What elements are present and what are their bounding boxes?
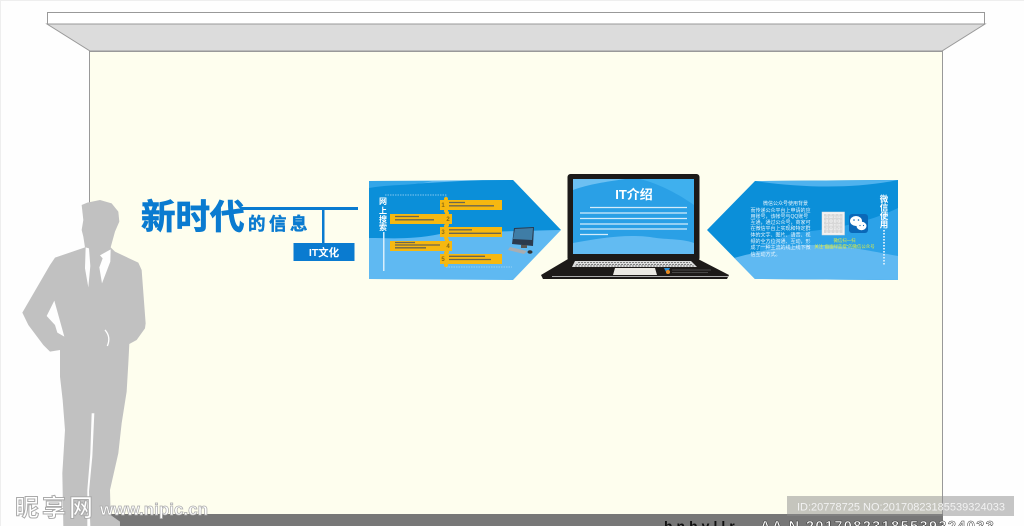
list items: 5 (441, 257, 445, 263)
vertical title: 微 (880, 194, 889, 204)
yellow caption: 微信扫一扫 (834, 237, 855, 244)
QR code (822, 212, 844, 235)
keyboard (572, 261, 697, 267)
tag: IT文化: IT文化 (309, 246, 340, 259)
body text: 用账号，该帐号与QQ账号 (750, 213, 808, 220)
body text: 在微信平台上实现和特定群 (750, 225, 811, 232)
panel: laptop IT介绍 (541, 174, 729, 279)
heading: 新时代的信息: 的信息 (248, 214, 311, 234)
body text: 微信公众号使用背景 (763, 200, 808, 207)
body text: 体的文字、图片、语音、视 (750, 232, 811, 238)
body text: 成了一种主流的线上线下微 (750, 244, 811, 251)
trackpad (613, 268, 657, 275)
floor band (89, 514, 943, 526)
icon: desktop computer (508, 227, 534, 254)
yellow caption: 关注"幽幽绿蓝摆"的微信公众号 (814, 243, 875, 250)
icon: wechat (849, 214, 868, 233)
body text (750, 200, 811, 258)
vertical title: 上 (379, 206, 387, 216)
body text: 信互动方式。 (750, 251, 781, 258)
panel: 微信使用 (707, 180, 899, 280)
vertical title: 网 (379, 197, 387, 206)
laptop base (541, 259, 729, 279)
list items: 4 (446, 244, 450, 250)
ceiling top band (48, 12, 984, 24)
cream wall (90, 52, 942, 526)
list items: 2 (446, 217, 450, 223)
vertical title (880, 194, 889, 265)
list items: 3 (441, 230, 445, 236)
heading: 新时代的信息 (141, 199, 358, 244)
tag: IT文化 (294, 243, 354, 261)
ceiling soffit (47, 24, 985, 51)
body text: 频的全方位沟通、互动，形 (750, 238, 811, 245)
vertical title (379, 197, 387, 271)
watermark: nipic logo (15, 495, 208, 522)
laptop lid (568, 174, 700, 261)
small logo (664, 268, 711, 274)
watermark: ID box: ID:20778725 NO:20170823185539324033 (797, 502, 1005, 514)
panel: 网上搜索 (369, 180, 562, 280)
vertical title: 信 (880, 202, 889, 212)
screen title: IT介绍 (615, 187, 653, 202)
body text: 而传递公众平台上申请的应 (750, 207, 811, 214)
yellow caption (814, 237, 875, 250)
laptop screen (573, 179, 694, 254)
vertical title: 用 (880, 220, 888, 230)
watermark: ID box (787, 496, 1014, 516)
heading: 新时代的信息: 新时代 (141, 199, 244, 237)
screen text lines (580, 208, 688, 234)
list items: 1 (441, 203, 445, 209)
vertical title: 索 (379, 222, 387, 232)
vertical title: 使 (880, 211, 889, 221)
vertical title: 搜 (379, 214, 387, 224)
watermark: nipic logo: 昵享网 (15, 495, 96, 522)
human silhouette (22, 200, 146, 526)
watermark: nipic logo: www.nipic.cn (99, 500, 208, 519)
list items (390, 197, 502, 267)
clipped bottom text (664, 518, 995, 526)
body text: 互通，通过公众号，商家可 (750, 219, 811, 226)
